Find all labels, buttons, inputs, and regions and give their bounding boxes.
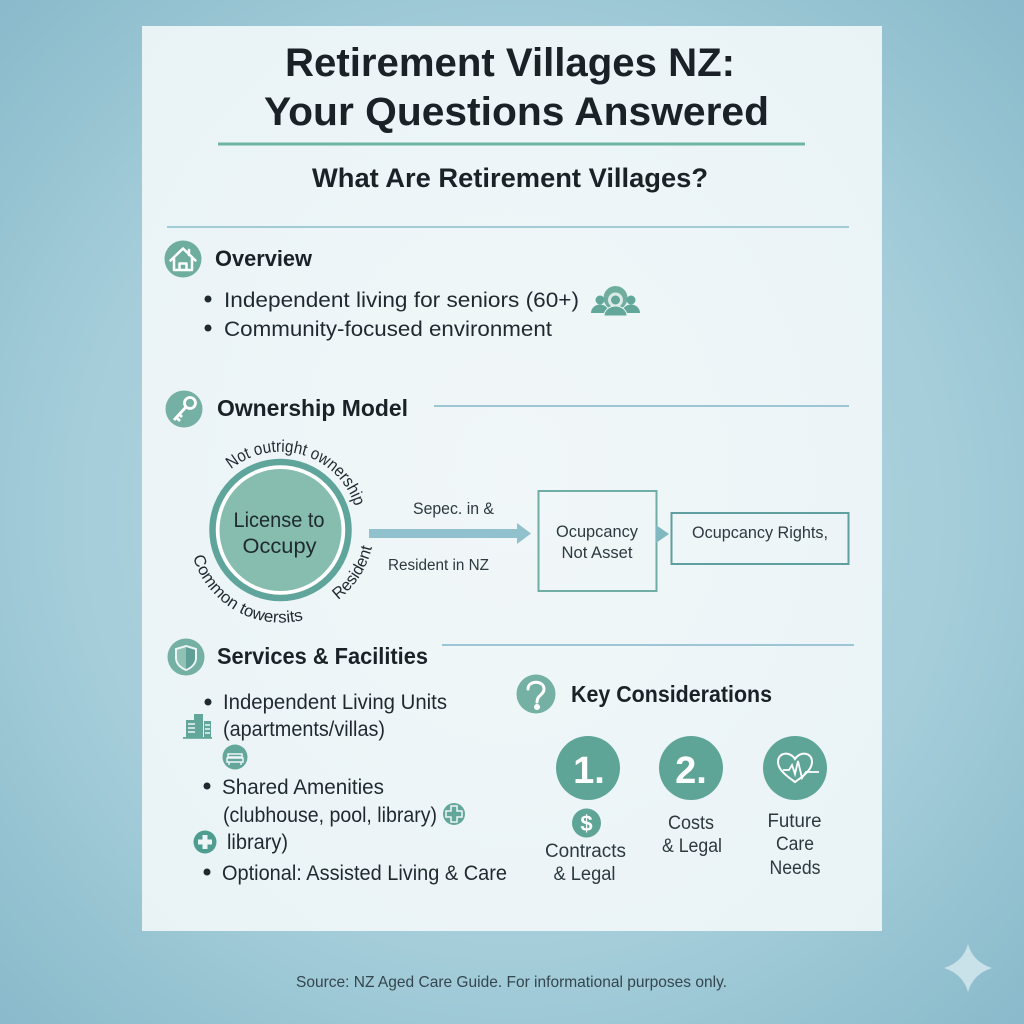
circle: license to occupy: Occupy (242, 535, 317, 558)
title: Retirement Villages NZ: (285, 41, 735, 85)
heading: key considerations: Key Considerations (571, 681, 772, 707)
overview bullet list: Independent living for seniors (60+) (224, 288, 579, 312)
icon: house (164, 240, 202, 278)
heading: ownership model: Ownership Model (217, 395, 408, 421)
arrow: box connector (656, 525, 669, 543)
heading: overview: Overview (215, 246, 313, 271)
box: occupancy rights: Ocupcancy Rights, (692, 524, 828, 542)
curved label: common towersits: Common towersits (194, 555, 302, 623)
item 1: contracts and legal: 1. (573, 750, 605, 792)
services bullet list: Optional: Assisted Living & Care (222, 861, 507, 885)
panel: overview (164, 240, 640, 341)
title (264, 41, 769, 134)
title underline (218, 142, 805, 146)
title: Your Questions Answered (264, 90, 769, 134)
curved label: resident: Resident (332, 545, 372, 600)
icon: key (166, 390, 202, 428)
icon: building (183, 714, 212, 739)
box: occupancy rights (672, 513, 848, 564)
item 2: costs and legal: 2. (675, 750, 707, 792)
panel: key considerations (516, 674, 827, 885)
circle: license to occupy: License to (234, 509, 324, 532)
curved label: not outright ownership: Not outright ownership (225, 440, 363, 505)
arrow: license to occupancy (369, 523, 531, 544)
icon: people (591, 286, 640, 316)
circle: license to occupy (212, 462, 348, 598)
item 2: costs and legal: & Legal (662, 836, 722, 857)
subtitle: What Are Retirement Villages? (312, 163, 708, 193)
item 3: future care needs (763, 736, 827, 879)
icon: sparkle star (944, 944, 992, 992)
box: occupancy not asset: Not Asset (562, 544, 633, 562)
item 1: contracts and legal: & Legal (554, 864, 616, 885)
arrow label: bottom: Resident in NZ (388, 557, 489, 574)
item 1: contracts and legal (545, 736, 626, 885)
icon: plus upper (443, 803, 465, 825)
services bullet list: library) (227, 830, 288, 854)
item 2: costs and legal: Costs (668, 813, 714, 834)
box: occupancy not asset (538, 491, 656, 591)
services bullet list (204, 690, 507, 885)
overview bullet list (204, 288, 579, 341)
panel: main card (142, 26, 882, 931)
services bullet list: Independent Living Units (223, 690, 447, 714)
panel: services and facilities (168, 638, 854, 885)
item 3: future care needs: Future (768, 811, 822, 832)
panel: ownership model (166, 390, 850, 623)
item 3: future care needs: Needs (770, 858, 820, 879)
item 1: contracts and legal: Contracts (545, 841, 626, 862)
icon: question mark (516, 674, 556, 714)
services bullet list: (apartments/villas) (223, 717, 385, 741)
services bullet list: (clubhouse, pool, library) (223, 803, 437, 827)
source note: Source: NZ Aged Care Guide. For informational purposes only. (296, 974, 727, 991)
item 3: future care needs: Care (776, 834, 814, 855)
box: occupancy not asset: Ocupcancy (556, 523, 639, 541)
icon: plus lower (194, 830, 216, 854)
item 2: costs and legal (659, 736, 723, 857)
heading: services and facilities: Services & Facilities (217, 643, 428, 669)
item 1: contracts and legal: $ (580, 811, 593, 836)
icon: sofa (222, 744, 248, 770)
icon: shield (168, 638, 204, 676)
services bullet list: Shared Amenities (222, 775, 384, 799)
arrow label: top: Sepec. in & (413, 500, 494, 518)
overview bullet list: Community-focused environment (224, 317, 552, 341)
